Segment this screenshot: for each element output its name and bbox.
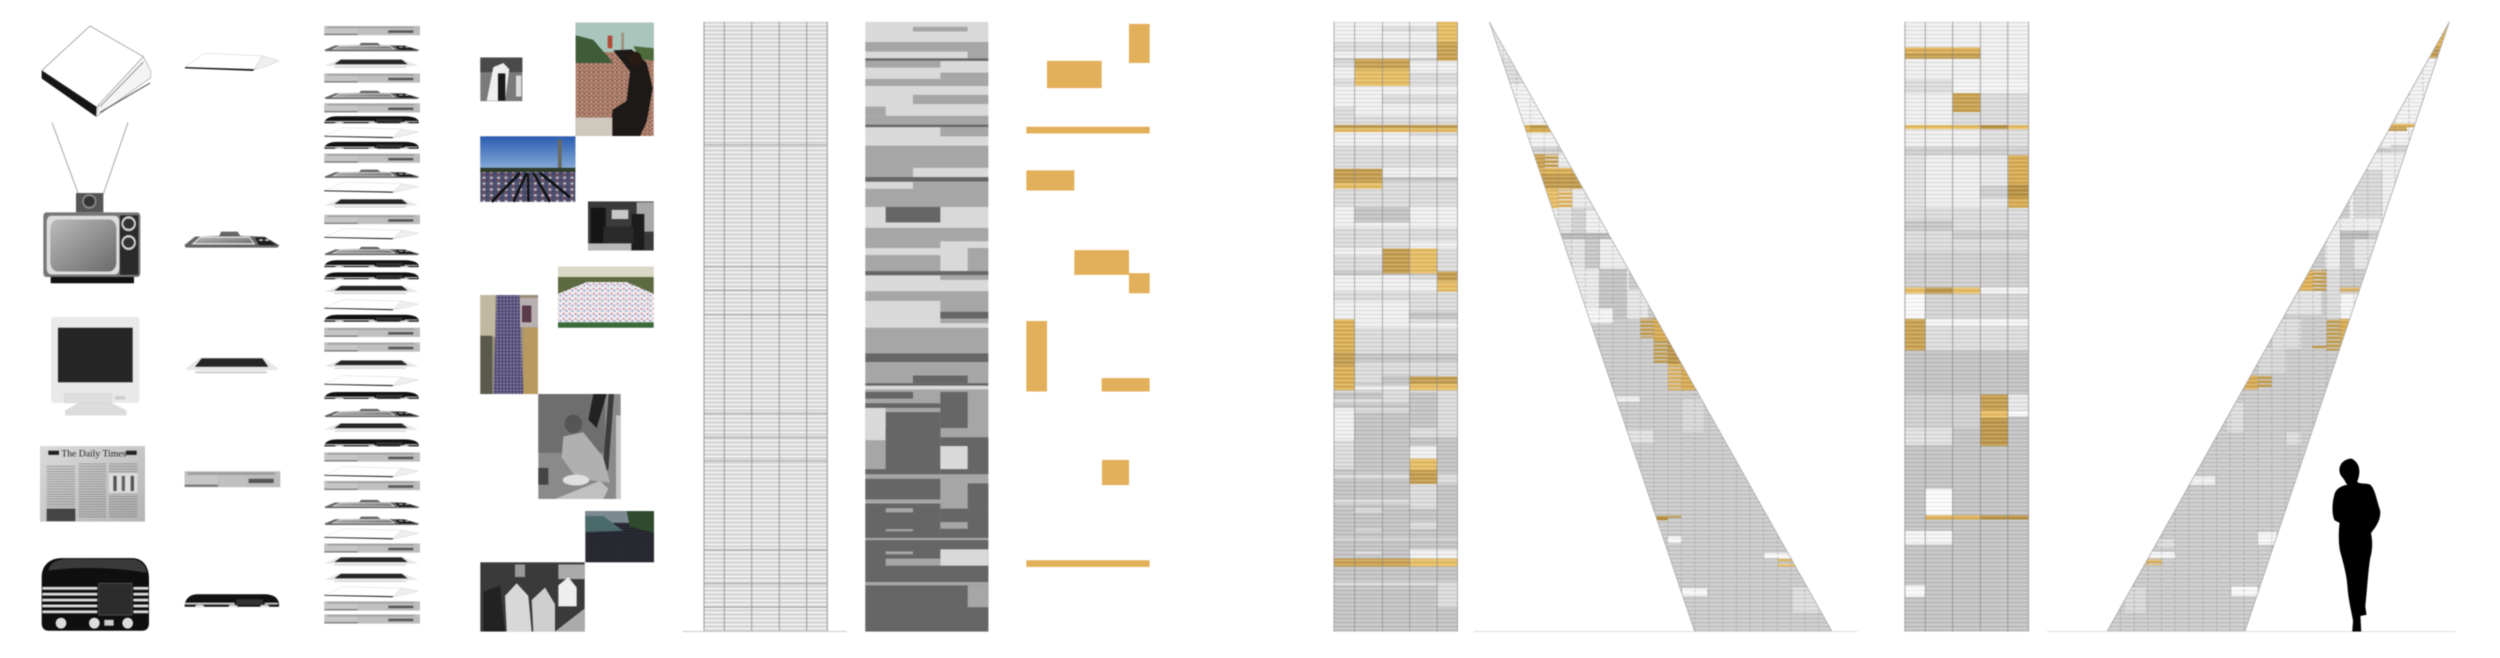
icon: human silhouette for scale	[2332, 459, 2380, 632]
chart: ascending wedge	[2047, 22, 2456, 632]
gold highlights in wedge	[2145, 22, 2456, 565]
panel: stack of flattened media	[324, 26, 420, 624]
gold highlights	[1905, 47, 2029, 520]
panel: original media objects	[40, 26, 151, 631]
icon: flattened radio	[185, 594, 279, 607]
gold highlights	[1334, 22, 1457, 567]
photo: march through city street	[480, 295, 538, 394]
photo: lunch counter sit-in	[480, 562, 585, 632]
chart: combined overlay column one	[1334, 22, 1458, 632]
chart: highlighted gold blocks	[1026, 24, 1150, 567]
icon: book	[42, 26, 151, 117]
icon: flattened book	[185, 53, 279, 71]
icon: computer monitor	[51, 317, 139, 415]
panel: flattened media objects	[184, 53, 280, 607]
panel: historical photographs	[480, 23, 654, 632]
icon: radio	[42, 558, 149, 631]
photo: speech on the mall	[576, 23, 654, 136]
newspaper masthead: The Daily Times	[61, 449, 127, 460]
chart: combined overlay column two	[1905, 22, 2029, 632]
chart: striped time-slice grid	[683, 22, 847, 632]
icon: flattened television	[184, 232, 279, 248]
photo: women at ballot box	[588, 201, 654, 251]
gold highlights in wedge	[1521, 125, 1795, 567]
chart: grayscale coverage blocks	[865, 22, 988, 632]
icon: newspaper	[40, 446, 145, 522]
photo: quilt with monument	[480, 136, 575, 202]
icon: flattened monitor	[185, 358, 279, 373]
icon: television	[43, 123, 140, 283]
photo: quilt on national mall	[558, 266, 654, 328]
chart: descending wedge	[1474, 22, 1857, 632]
photo: sailor kiss	[480, 57, 522, 101]
photo: crowd at the mall	[585, 511, 654, 562]
photo: migrant mother	[538, 394, 621, 499]
icon: flattened newspaper	[185, 471, 280, 487]
